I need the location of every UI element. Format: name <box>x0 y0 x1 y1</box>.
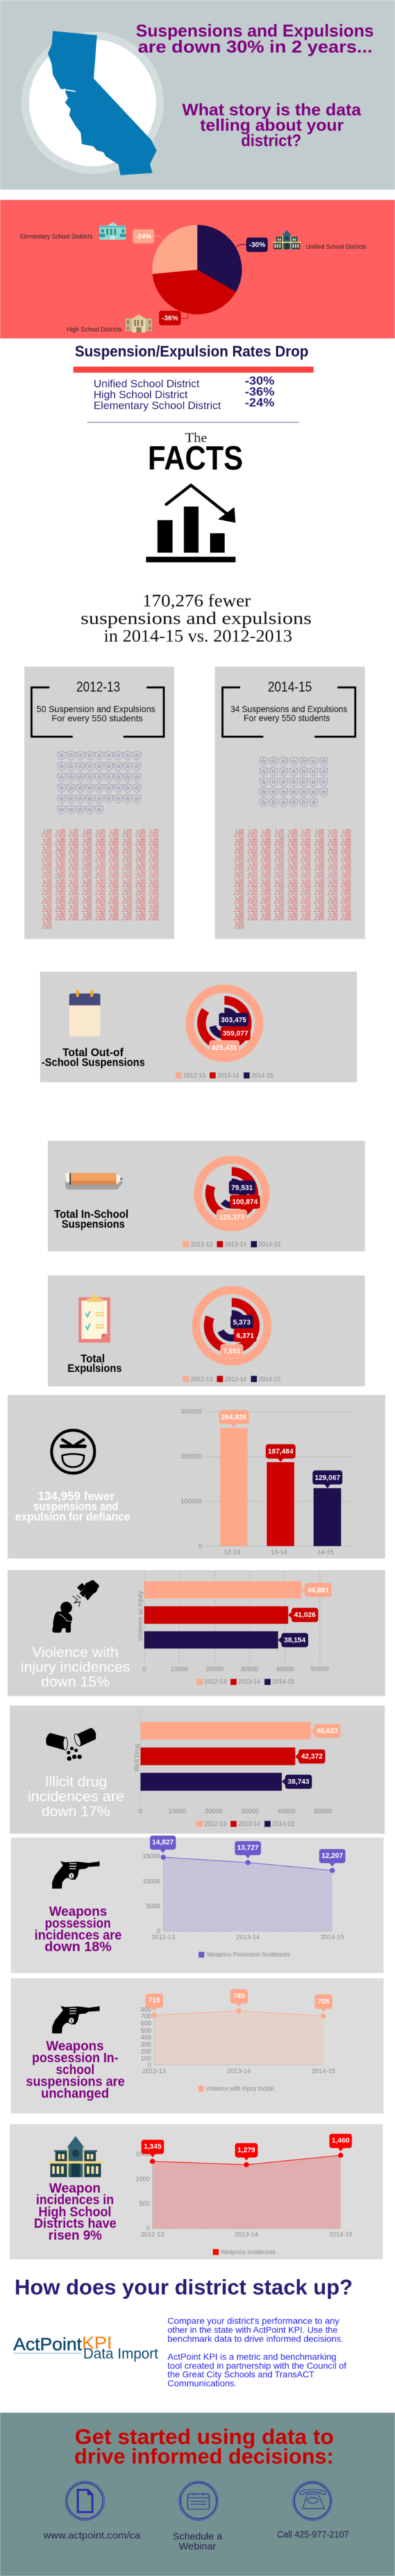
area chart <box>140 1989 335 2092</box>
legend <box>183 1376 281 1383</box>
tooltip: 125,373 <box>217 1210 247 1228</box>
text: webinar: Schedule a <box>173 2531 223 2542</box>
icon: teal school <box>99 222 126 240</box>
tooltip: 129,067 <box>313 1470 342 1488</box>
bar chart: 0 <box>198 1543 202 1550</box>
tooltip: 44,881: 44,881 <box>307 1586 329 1594</box>
text block: district rates: Unified School District <box>94 377 199 390</box>
legend <box>183 1241 281 1249</box>
logo: ActPoint KPI Data Import: Data Import <box>83 2345 158 2362</box>
label: Expulsions <box>67 1362 122 1375</box>
text: expulsion for defiance <box>15 1510 130 1523</box>
logo: ActPoint KPI Data Import: KPI <box>82 2333 112 2352</box>
area chart: 2014-15 <box>312 2068 335 2075</box>
text: unchanged <box>41 2086 109 2101</box>
icon: tan school <box>126 315 152 332</box>
text block: about ActPoint KPI: Compare your district's performance to any <box>167 2316 339 2326</box>
subtitle question: telling about your <box>200 115 344 135</box>
legend: 2014-15 <box>259 1376 281 1383</box>
text <box>26 2039 124 2101</box>
callout: -36% <box>159 311 188 325</box>
area chart: 400 <box>140 2034 151 2041</box>
text block: district rates: High School District <box>94 389 188 401</box>
tooltip: 14,827 <box>150 1835 176 1853</box>
legend: 2014-15 <box>259 1242 281 1249</box>
title <box>136 21 374 56</box>
horizontal bar chart: 0 <box>139 1809 142 1816</box>
tooltip: 359,077: 359,077 <box>223 1030 248 1038</box>
year: 2014-15 <box>268 678 312 694</box>
tooltip: 359,077 <box>221 1026 250 1043</box>
icon: document <box>65 2481 105 2520</box>
tooltip: 13,727: 13,727 <box>237 1844 258 1851</box>
tooltip: 41,026: 41,026 <box>294 1611 315 1619</box>
year: 2012-13 <box>76 678 120 694</box>
panel: 2014-15 students <box>215 667 365 939</box>
legend: 2012-13 <box>183 1072 206 1079</box>
text: possession In- <box>32 2051 119 2065</box>
text: incidences are <box>35 1928 122 1942</box>
label: elementary: Elementary School Districts <box>20 233 92 241</box>
panel: violence with injury <box>8 1570 385 1696</box>
icon: calendar <box>179 2481 218 2520</box>
red bar <box>73 366 314 373</box>
callout: -36%: -36% <box>162 315 178 322</box>
icons: 50 shields <box>58 751 141 814</box>
area chart: 800 <box>140 2006 151 2014</box>
text block: about ActPoint KPI: benchmark data to drive informed decisions. <box>167 2334 344 2344</box>
icon: dark school <box>273 230 301 249</box>
tooltip: 12,207 <box>319 1849 346 1867</box>
icon: revolver <box>52 1861 99 1889</box>
horizontal bar chart: 50000 <box>311 1666 329 1673</box>
panel: total out-of-school suspensions <box>40 972 357 1082</box>
tooltip: 303,475: 303,475 <box>221 1017 246 1024</box>
text: suspensions and <box>33 1500 119 1513</box>
area chart: 1500 <box>136 2151 150 2158</box>
tooltip: 1,345: 1,345 <box>144 2143 162 2151</box>
legend: Weapons Incidences <box>221 2249 276 2256</box>
text: 170,276 fewer: in 2014-15 vs. 2012-2013 <box>104 627 292 646</box>
description: 50 Suspension and Expulsions <box>37 704 155 714</box>
text <box>21 1645 130 1690</box>
area chart: 600 <box>140 2021 151 2028</box>
legend: 2014-15 <box>273 1678 294 1686</box>
label <box>42 1046 145 1069</box>
pie chart <box>152 225 242 315</box>
text: 170,276 fewer: 170,276 fewer <box>142 591 251 611</box>
text: suspensions are <box>26 2074 124 2089</box>
subtitle question: What story is the data <box>182 100 362 119</box>
text: incidences are <box>28 1789 124 1805</box>
area chart: 200 <box>140 2049 151 2056</box>
horizontal bar chart: Illicit Drug <box>133 1744 141 1771</box>
text: incidences in <box>36 2193 114 2208</box>
tooltip: 425,431 <box>209 1040 239 1058</box>
bar chart: 14-15 <box>317 1549 334 1556</box>
legend: 2013-14 <box>239 1678 260 1686</box>
icon: white circle behind state <box>25 36 160 170</box>
tooltip: 7,851 <box>221 1344 243 1362</box>
tooltip: 303,475 <box>219 1013 248 1030</box>
text <box>35 1905 122 1955</box>
heading: drive informed decisions: <box>74 2445 334 2468</box>
description <box>231 704 347 723</box>
heading: rates drop: Suspension/Expulsion Rates Drop <box>75 343 308 361</box>
horizontal bar chart: 10000 <box>168 1809 187 1816</box>
text: Weapons <box>46 2039 104 2054</box>
legend: 2012-13 <box>190 1242 213 1249</box>
icons: 34 shields <box>260 757 328 807</box>
legend <box>176 1072 273 1079</box>
tooltip: 705 <box>315 1994 332 2012</box>
text: Weapon <box>49 2181 101 2195</box>
label <box>54 1208 128 1231</box>
bracket <box>223 687 355 737</box>
heading: The Facts: The <box>185 430 207 445</box>
icons: 100 students at desks <box>233 829 351 928</box>
icon: California map <box>48 31 156 175</box>
bar chart: 12-13 <box>224 1549 240 1556</box>
description: For every 550 students <box>244 712 330 723</box>
heading: how does your district stack up: How does your district stack up? <box>15 2276 353 2299</box>
horizontal bar chart: 40000 <box>276 1666 294 1673</box>
text block: about ActPoint KPI: the Great City Schools and TransACT <box>167 2369 315 2379</box>
tooltip: 42,372 <box>295 1750 325 1764</box>
area chart: 2012-13 <box>151 1934 175 1941</box>
tooltip: 425,431: 425,431 <box>212 1044 237 1052</box>
panel: defiance <box>8 1395 385 1559</box>
icon: angry face <box>51 1430 95 1473</box>
area chart: 10000 <box>142 1878 160 1885</box>
panel: weapon incidences in high school districts <box>10 2124 383 2260</box>
horizontal bar chart: 30000 <box>240 1666 259 1673</box>
label: high school: High School Districts <box>67 326 122 334</box>
horizontal bar chart: 50000 <box>314 1809 332 1816</box>
tooltip: 7,851: 7,851 <box>223 1348 240 1356</box>
description <box>37 704 155 723</box>
tooltip: 46,623 <box>311 1724 340 1738</box>
text block: district rates <box>94 375 274 411</box>
horizontal bar chart: 20000 <box>206 1666 224 1673</box>
text: 170,276 fewer <box>81 591 312 646</box>
tooltip: 1,345 <box>141 2140 164 2158</box>
text: Weapons <box>49 1905 107 1919</box>
callout: -30%: -30% <box>249 241 265 249</box>
tooltip: 13,727 <box>235 1841 261 1858</box>
label: Total <box>81 1352 105 1365</box>
tooltip: 6,371: 6,371 <box>237 1332 254 1340</box>
tooltip: 187,484 <box>265 1444 296 1462</box>
text block: about ActPoint KPI <box>167 2316 346 2388</box>
text <box>28 1773 124 1819</box>
text block: about ActPoint KPI: tool created in partnership with the Council of <box>167 2360 346 2370</box>
tooltip: 129,067: 129,067 <box>315 1474 340 1482</box>
text: 134,959 fewer <box>38 1490 115 1503</box>
icon: clipboard checklist <box>79 1293 110 1343</box>
horizontal bar chart: Violence w/ Injury <box>137 1591 144 1641</box>
text: 170,276 fewer: suspensions and expulsions <box>81 609 312 628</box>
tooltip: 38,743: 38,743 <box>288 1778 309 1785</box>
horizontal bar chart: 30000 <box>241 1809 259 1816</box>
area chart: 100 <box>140 2055 151 2062</box>
text: school <box>56 2063 94 2078</box>
bar chart: 200000 <box>181 1453 202 1461</box>
legend: 2013-14 <box>224 1376 247 1383</box>
label: unified: Unified School Districts <box>306 243 367 250</box>
tooltip: 46,623: 46,623 <box>316 1727 338 1735</box>
legend: 2012-13 <box>190 1376 213 1383</box>
label: -School Suspensions <box>42 1056 145 1069</box>
legend: 2013-14 <box>224 1242 247 1249</box>
label: Total Out-of <box>62 1046 124 1058</box>
tooltip: 715: 715 <box>148 1997 160 2005</box>
tooltip: 264,026: 264,026 <box>221 1414 247 1422</box>
legend: Weapons Possesion Incidences <box>206 1951 290 1958</box>
icon: falling bar chart <box>146 485 235 562</box>
title: are down 30% in 2 years... <box>138 37 373 56</box>
legend: 2014-15 <box>251 1072 273 1079</box>
text: injury incidences <box>21 1659 130 1675</box>
icon: school building <box>48 2136 103 2177</box>
bar chart: 13-14 <box>271 1549 287 1556</box>
legend: Violence with Injury Incide.. <box>206 2085 277 2092</box>
legend: 2012-13 <box>205 1678 226 1686</box>
tooltip: 5,373: 5,373 <box>233 1318 251 1326</box>
text block: about ActPoint KPI: ActPoint KPI is a metric and benchmarking <box>167 2351 336 2361</box>
tooltip: 785 <box>230 1989 248 2006</box>
panel: weapons in-school suspensions <box>11 1978 383 2113</box>
tooltip: 41,026 <box>288 1608 318 1622</box>
panel: 2012-13 students <box>24 667 174 939</box>
area chart: 0 <box>147 2062 151 2069</box>
tooltip: 38,743 <box>282 1775 312 1789</box>
logo: ActPoint KPI Data Import <box>13 2333 158 2362</box>
horizontal bar chart: 40000 <box>278 1809 296 1816</box>
tooltip: 264,026 <box>219 1410 249 1427</box>
area chart: 0 <box>146 2226 150 2233</box>
tooltip: 5,373 <box>231 1315 253 1332</box>
callout: -24% <box>133 229 164 243</box>
area chart: 500 <box>139 2201 150 2208</box>
panel: header <box>0 0 395 190</box>
heading <box>74 2425 334 2468</box>
tooltip: 38,154 <box>278 1633 308 1647</box>
area chart: 2012-13 <box>142 2068 166 2075</box>
panel: call to action <box>0 2413 395 2576</box>
horizontal bar chart <box>133 1710 340 1828</box>
description: For every 550 students <box>51 713 143 723</box>
tooltip: 715 <box>146 1994 163 2011</box>
legend: 2012-13 <box>205 1821 226 1828</box>
area chart: 2012-13 <box>140 2231 164 2238</box>
label: Suspensions <box>62 1218 125 1231</box>
tooltip: 705: 705 <box>317 1998 330 2005</box>
icon: pencil <box>65 1173 123 1190</box>
area chart: 500 <box>140 2028 151 2035</box>
text: risen 9% <box>48 2228 102 2243</box>
bar chart: 300000 <box>181 1408 202 1416</box>
icon: fist hitting person <box>53 1580 99 1632</box>
subtitle question <box>182 100 362 150</box>
heading: The Facts: FACTS <box>148 439 243 477</box>
text block: district rates: -24% <box>245 396 274 409</box>
panel: total in-school suspensions <box>48 1141 365 1251</box>
tooltip: 44,881 <box>301 1583 332 1597</box>
area chart: 2013-14 <box>227 2068 251 2075</box>
panel: total expulsions <box>48 1276 365 1386</box>
text <box>15 1490 130 1523</box>
text: down 17% <box>42 1803 110 1819</box>
text: Violence with <box>32 1645 119 1661</box>
panel: pie chart band <box>0 200 395 338</box>
area chart: 700 <box>140 2014 151 2021</box>
area chart: 0 <box>156 1928 160 1935</box>
donut chart <box>196 1290 267 1361</box>
tooltip: 1,460: 1,460 <box>332 2137 349 2145</box>
label: Total In-School <box>54 1208 128 1220</box>
area chart <box>142 1835 346 1958</box>
tooltip: 38,154: 38,154 <box>284 1636 306 1644</box>
text: webinar: Webinar <box>179 2541 216 2552</box>
tooltip: 42,372: 42,372 <box>301 1753 323 1760</box>
legend: 2013-14 <box>239 1821 260 1828</box>
text: Illicit drug <box>45 1773 107 1789</box>
text: possession <box>45 1916 111 1931</box>
horizontal bar chart: 10000 <box>171 1666 189 1673</box>
text block: district rates: -36% <box>245 386 274 398</box>
title: Suspensions and Expulsions <box>136 21 374 40</box>
callout: -30% <box>237 238 268 252</box>
area chart: 2014-15 <box>329 2231 353 2238</box>
description: 34 Suspensions and Expulsions <box>231 704 347 714</box>
text: Districts have <box>34 2217 117 2231</box>
legend: 2014-15 <box>273 1821 294 1828</box>
text: down 15% <box>41 1674 110 1690</box>
subtitle question: district? <box>241 131 301 150</box>
icon: telephone <box>293 2481 332 2520</box>
text block: about ActPoint KPI: other in the state with ActPoint KPI. Use the <box>167 2325 338 2335</box>
tooltip: 1,279: 1,279 <box>237 2146 255 2154</box>
area chart: 2013-14 <box>236 1934 260 1941</box>
bracket <box>31 687 164 737</box>
area chart: 15000 <box>142 1853 160 1860</box>
donut chart <box>198 1160 265 1227</box>
tooltip: 1,279 <box>235 2143 258 2160</box>
horizontal bar chart <box>137 1571 332 1686</box>
logo: ActPoint KPI Data Import: ActPoint <box>13 2334 82 2354</box>
area chart: 300 <box>140 2042 151 2049</box>
text: phone: Call 425-977-2107 <box>277 2529 349 2540</box>
text <box>34 2181 117 2243</box>
text block: district rates: -30% <box>245 375 274 388</box>
label <box>67 1352 122 1375</box>
legend: 2013-14 <box>217 1072 239 1079</box>
area chart: 2014-15 <box>321 1934 344 1941</box>
area chart: 2013-14 <box>235 2231 258 2238</box>
legend <box>196 1821 294 1828</box>
horizontal bar chart: 0 <box>142 1666 146 1673</box>
area chart: 5000 <box>146 1903 160 1910</box>
icon: calendar <box>69 990 100 1037</box>
tooltip: 785: 785 <box>233 1992 245 2000</box>
panel: illicit drug <box>10 1705 385 1834</box>
text block: about ActPoint KPI: Communications. <box>167 2378 237 2388</box>
tooltip: 100,874 <box>230 1195 260 1212</box>
tooltip: 14,827: 14,827 <box>152 1839 174 1846</box>
bar chart: 100000 <box>181 1498 202 1505</box>
icon: spilling pills <box>46 1728 96 1760</box>
area chart: 1000 <box>136 2176 150 2183</box>
horizontal bar chart: 20000 <box>205 1809 223 1816</box>
tooltip: 187,484: 187,484 <box>268 1448 294 1456</box>
bar chart <box>181 1408 353 1556</box>
icon: revolver <box>52 2006 99 2033</box>
text: down 18% <box>45 1940 112 1955</box>
tooltip: 125,373: 125,373 <box>219 1213 244 1221</box>
heading: Get started using data to <box>75 2425 333 2449</box>
tooltip: 6,371 <box>234 1328 256 1346</box>
text: High School <box>38 2204 112 2219</box>
callout: -24%: -24% <box>135 233 152 240</box>
text block: district rates: Elementary School District <box>94 399 221 411</box>
text: website: www.actpoint.com/ca <box>43 2531 141 2541</box>
text: webinar <box>173 2531 223 2552</box>
tooltip: 79,531 <box>229 1181 255 1198</box>
legend <box>196 1678 294 1686</box>
icons: 100 students at desks <box>42 829 159 928</box>
tooltip: 12,207: 12,207 <box>321 1852 343 1860</box>
donut chart <box>190 989 259 1058</box>
tooltip: 1,460 <box>330 2134 352 2151</box>
panel: weapons possession <box>11 1835 383 1973</box>
tooltip: 79,531: 79,531 <box>231 1184 253 1192</box>
tooltip: 100,874: 100,874 <box>232 1198 258 1206</box>
area chart <box>136 2134 353 2256</box>
